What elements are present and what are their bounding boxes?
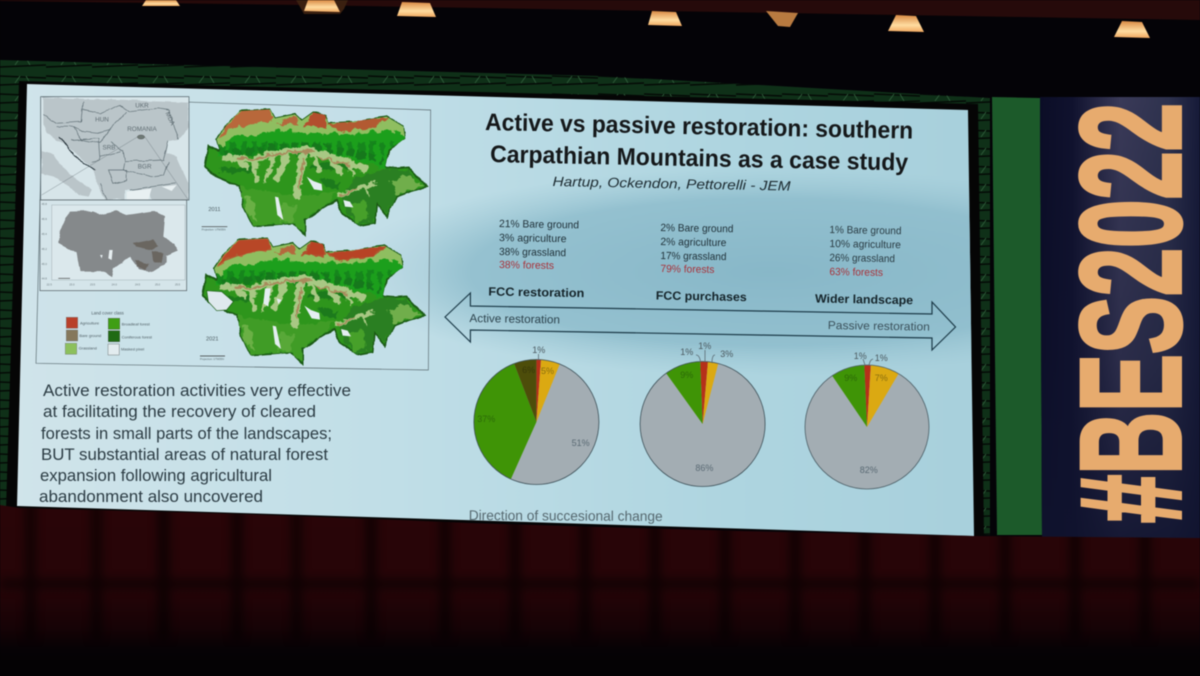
stats: Wider landscape: 26% grassland [829,252,895,265]
pie chart: FCC restoration: 51% [572,438,590,448]
map: Balkan locator inset: HUN [95,117,109,124]
map: study area locator: 45.0 [42,262,47,266]
legend: land cover class: Grassland [79,346,97,351]
legend: land cover class: Masked pixel [121,347,144,352]
stats: Wider landscape: 10% agriculture [829,238,901,251]
caption: direction of change: Direction of succesional change [469,507,663,524]
column heading: Wider landscape: Wider landscape [815,292,914,307]
map: land cover 2021: Projection: UTM35N [200,357,224,361]
title: Carpathian Mountains as a case study [490,141,909,176]
black slide surround [6,81,984,536]
legend: land cover class [65,310,153,355]
pie chart: FCC restoration: 6% [522,365,535,375]
pie chart: FCC purchases: 3% [720,349,733,359]
map: study area locator: 23.5 [90,282,96,286]
stats: FCC purchases: 17% grassland [660,250,727,263]
map: land cover 2011: Projection: UTM35N [202,228,226,232]
legend: land cover class: Land cover class [91,310,124,315]
pie chart: FCC purchases [640,341,765,486]
column heading: FCC purchases: FCC purchases [656,289,747,304]
text block: takeaway: abandonment also uncovered [39,488,263,506]
pie chart: FCC restoration: 1% [532,345,545,355]
stats: FCC restoration: 3% agriculture [499,232,567,245]
stats: Wider landscape [829,224,902,279]
stats: FCC restoration: 38% forests [499,259,554,272]
pie chart: Wider landscape: 7% [875,373,888,383]
stats: FCC purchases [660,222,734,276]
pie chart: FCC purchases: 1% [680,347,693,357]
green textured stage frame [0,60,990,535]
pie chart: FCC purchases: 86% [695,463,713,473]
legend: land cover class: Coniferous forest [122,334,153,339]
panel: maps figure [36,97,431,370]
text block: takeaway [39,382,351,506]
pie chart: Wider landscape: 1% [854,351,867,361]
stats: Wider landscape: 1% Bare ground [829,224,902,237]
stats: FCC purchases: 2% Bare ground [660,222,734,235]
map: study area locator: 23.0 [69,282,75,286]
map: Balkan locator inset: SRB [102,144,116,151]
map: study area locator: 25.0 [155,282,161,286]
ceiling strip [0,0,1200,20]
map: Balkan locator inset: BGR [138,163,152,170]
text block: takeaway: forests in small parts of the landscapes; [41,425,332,443]
pie chart: FCC purchases: 1% [698,341,711,351]
slide panel [16,83,975,537]
text block: takeaway: BUT substantial areas of natural forest [41,446,328,464]
stats: FCC restoration: 21% Bare ground [499,218,579,231]
pie chart: Wider landscape [805,351,929,489]
map: study area locator: 45.6 [42,217,47,221]
map: land cover 2011 [202,107,427,235]
stats: FCC purchases: 2% agriculture [660,236,727,249]
map: Balkan locator inset: MDA [164,111,176,127]
figure frame [36,97,431,370]
pie chart: Wider landscape: 9% [844,373,857,383]
stats: FCC restoration [499,218,579,272]
column heading: FCC restoration: FCC restoration [488,285,584,300]
pie chart: FCC restoration: 5% [541,366,554,376]
stats: Wider landscape: 63% forests [829,266,883,279]
map: Balkan locator inset: ROMANIA [127,126,158,133]
title [485,109,913,176]
authors line: Hartup, Ockendon, Pettorelli - JEM [552,174,792,194]
map: Balkan locator inset [41,97,189,200]
pie chart: FCC purchases: 9% [680,370,693,380]
label: 2021: 2021 [206,337,219,343]
label: 2011: 2011 [208,207,221,213]
legend: land cover class: Agriculture [80,321,100,326]
title: Active vs passive restoration: southern [485,109,913,145]
green side panel [992,97,1042,535]
legend: land cover class: Bare ground [79,333,101,338]
map: study area locator: 24.5 [135,282,141,286]
map: study area locator: 45.8 [42,202,47,206]
map: study area locator: 24.0 [112,282,117,286]
label: Passive restoration: Passive restoration [828,320,930,334]
text block: takeaway: at facilitating the recovery of cleared [43,403,316,421]
foreground: audience seats [0,504,1200,640]
pie chart: FCC restoration: 37% [477,414,495,424]
pie chart: Wider landscape: 82% [860,465,878,475]
pie chart: FCC restoration [474,345,599,484]
ceiling lamps [142,0,1150,38]
pie chart: Wider landscape: 1% [875,353,888,363]
map: study area locator: 25.5 [175,282,181,286]
conference banner [1040,97,1200,540]
map: land cover 2021 [200,236,424,364]
legend: land cover class: Broadleaf forest [122,321,151,326]
map: study area locator: 45.4 [42,232,47,236]
map: study area locator: 44.8 [42,276,47,280]
text block: takeaway: expansion following agricultural [40,467,272,485]
stats: FCC purchases: 79% forests [660,263,715,276]
arrow: active to passive restoration [445,293,956,350]
map: Balkan locator inset: UKR [135,102,149,109]
map: study area locator: 22.5 [47,282,52,286]
map: study area locator [40,200,187,291]
text block: takeaway: Active restoration activities very effective [43,382,351,400]
label: Active restoration: Active restoration [469,313,560,326]
stats: FCC restoration: 38% grassland [499,246,566,259]
map: study area locator: 45.2 [42,247,47,251]
